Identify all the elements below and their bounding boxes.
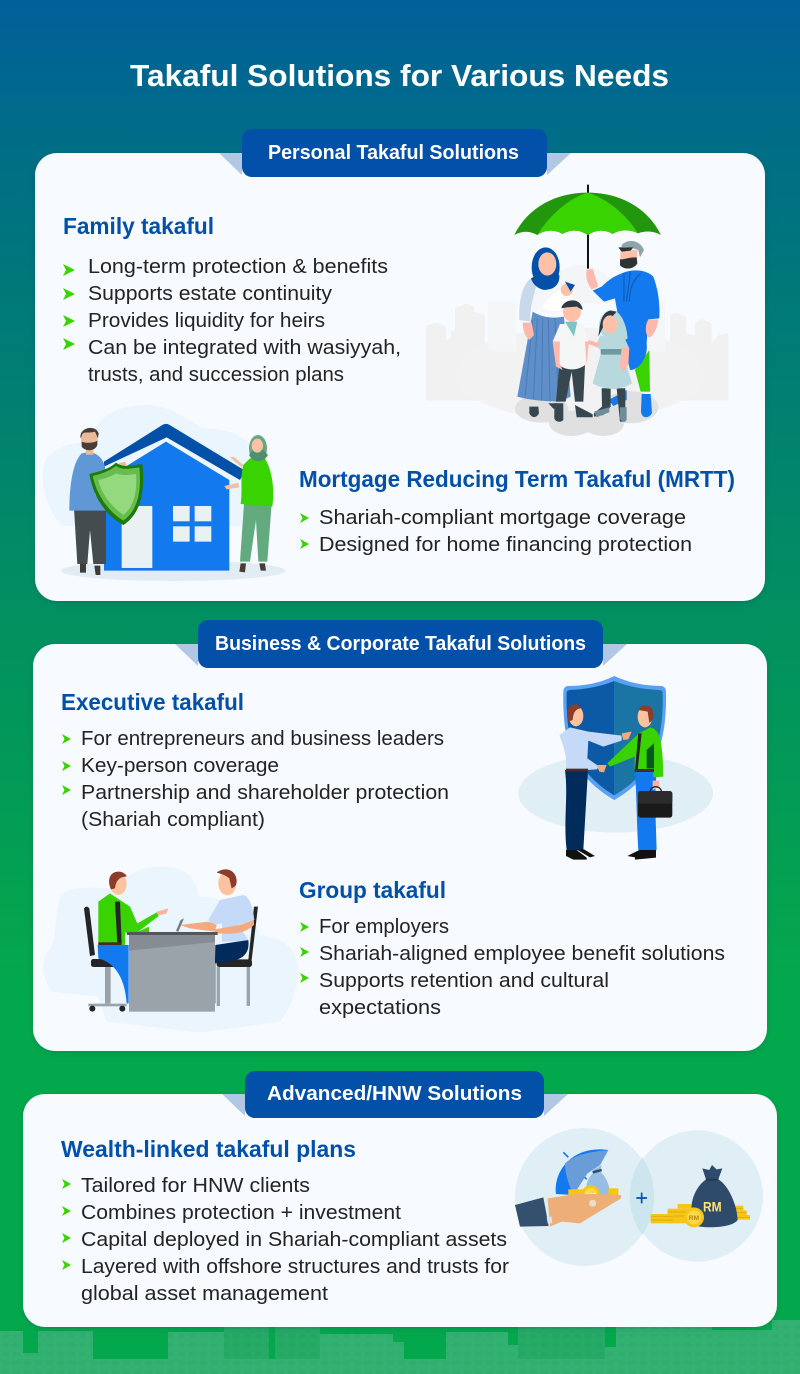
list: group takaful points: expectations — [319, 997, 441, 1019]
list: family takaful benefits: trusts, and succession plans — [88, 364, 344, 386]
umbrella and hand: RM — [585, 1192, 596, 1199]
list: family takaful benefits: Provides liquidity for heirs — [88, 310, 325, 332]
list: wealth-linked points: Layered with offshore structures and trusts for — [81, 1256, 509, 1278]
ribbon: business and corporate: Business & Corporate Takaful Solutions — [215, 633, 586, 655]
heading: family takaful: Family takaful — [63, 213, 214, 239]
list: wealth-linked points: Combines protection + investment — [81, 1202, 401, 1224]
father — [586, 241, 659, 417]
mother with baby — [517, 247, 575, 417]
left man — [559, 704, 632, 860]
list: executive takaful points: Partnership and shareholder protection — [81, 782, 449, 804]
list: executive takaful points: Key-person coverage — [81, 755, 279, 777]
list: wealth-linked points: Tailored for HNW clients — [81, 1175, 310, 1197]
money bag and coins: RM — [703, 1198, 722, 1214]
list: executive takaful points — [62, 728, 449, 831]
heading: mortgage reducing term takaful: Mortgage Reducing Term Takaful (MRTT) — [299, 466, 735, 492]
list: MRTT benefits: Shariah-compliant mortgage coverage — [319, 507, 686, 529]
plus sign — [636, 1193, 647, 1203]
list: MRTT benefits: Designed for home financing protection — [319, 534, 692, 556]
briefcase — [638, 787, 672, 818]
right man — [607, 705, 663, 860]
illustration: meeting at a desk — [43, 867, 298, 1033]
list: group takaful points: For employers — [319, 916, 449, 938]
panel: personal takaful solutions — [35, 129, 765, 601]
man — [69, 428, 127, 575]
ribbon: personal takaful solutions: Personal Takaful Solutions — [268, 142, 519, 164]
shield — [89, 463, 143, 525]
illustration: couple with house and shield — [43, 405, 286, 581]
money bag and coins — [651, 1165, 750, 1227]
ribbon: personal takaful solutions — [219, 129, 571, 177]
skyline at the bottom — [0, 1320, 800, 1374]
list: family takaful benefits: Supports estate continuity — [88, 283, 332, 305]
list: executive takaful points: (Shariah compliant) — [81, 809, 265, 831]
panel: advanced and HNW solutions — [23, 1071, 777, 1327]
list: family takaful benefits: Long-term protection & benefits — [88, 256, 388, 278]
right chair — [217, 907, 258, 1006]
illustration: protection plus investment — [515, 1128, 763, 1266]
list: MRTT benefits — [300, 507, 692, 556]
heading: wealth-linked takaful plans: Wealth-linked takaful plans — [61, 1136, 356, 1162]
panel: business and corporate takaful solutions — [33, 620, 767, 1051]
heading: group takaful: Group takaful — [299, 877, 446, 903]
left chair — [84, 907, 128, 1012]
girl — [588, 310, 632, 422]
right person — [176, 869, 254, 1003]
woman — [224, 435, 273, 572]
list: executive takaful points: For entrepreneurs and business leaders — [81, 728, 444, 750]
money bag and coins: RM — [689, 1215, 700, 1222]
list: wealth-linked points: Capital deployed in Shariah-compliant assets — [81, 1229, 507, 1251]
ribbon: advanced HNW: Advanced/HNW Solutions — [267, 1083, 522, 1105]
ribbon: business and corporate — [175, 620, 627, 668]
boy — [553, 300, 593, 422]
list: wealth-linked points: global asset management — [81, 1283, 328, 1305]
title: Takaful Solutions for Various Needs — [130, 58, 669, 93]
illustration: business handshake with shield — [518, 676, 713, 860]
desk — [127, 932, 218, 1012]
ribbon: advanced HNW — [222, 1071, 568, 1118]
umbrella and hand — [515, 1149, 621, 1227]
list: family takaful benefits — [63, 256, 401, 386]
illustration: family under umbrella — [426, 185, 728, 436]
list: group takaful points — [300, 916, 725, 1019]
list: wealth-linked points — [62, 1175, 509, 1305]
heading: executive takaful: Executive takaful — [61, 689, 244, 715]
left person — [98, 872, 168, 1003]
list: group takaful points: Shariah-aligned employee benefit solutions — [319, 943, 725, 965]
list: family takaful benefits: Can be integrated with wasiyyah, — [88, 337, 401, 359]
list: group takaful points: Supports retention and cultural — [319, 970, 609, 992]
